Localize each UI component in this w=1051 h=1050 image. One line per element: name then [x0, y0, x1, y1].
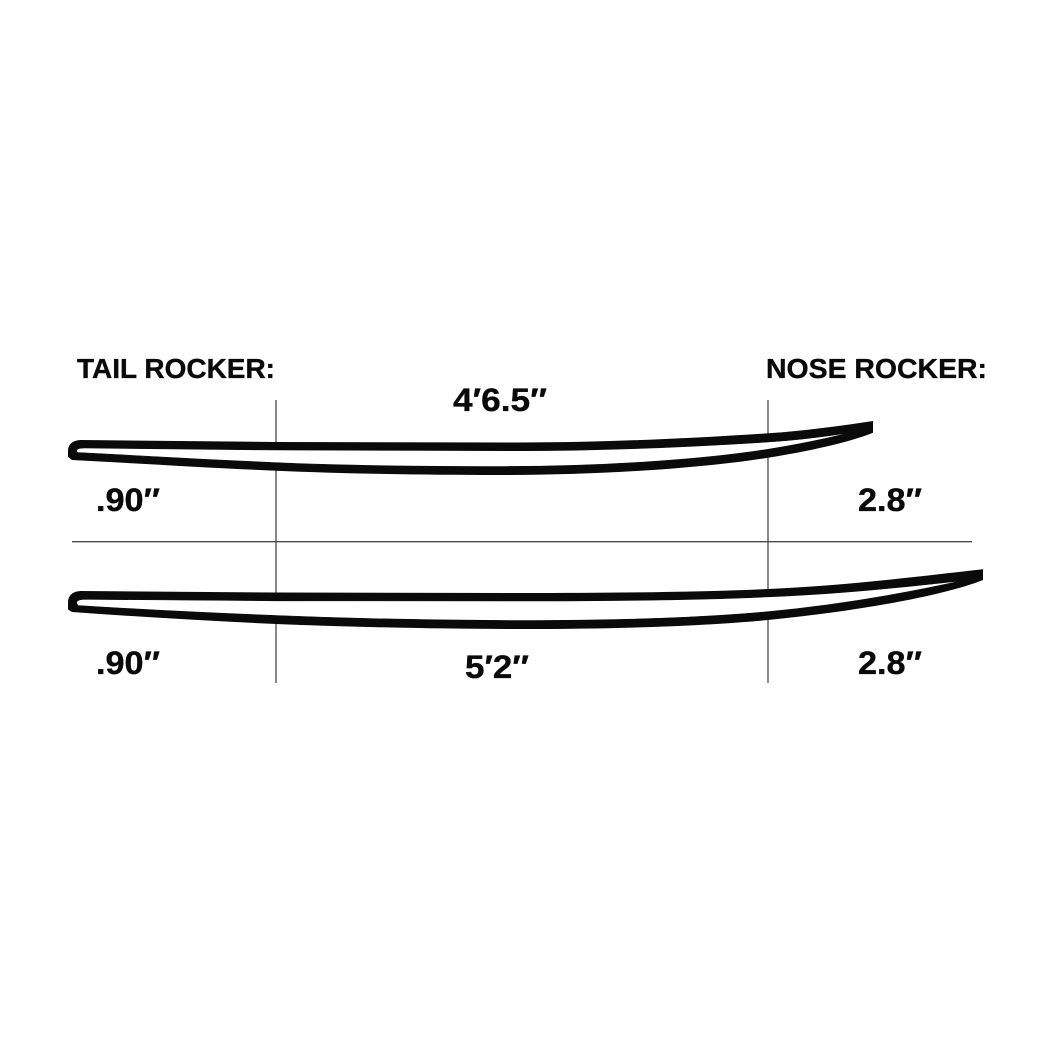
label: short board tail rocker: .90″ — [96, 482, 160, 518]
heading: nose rocker: NOSE ROCKER: — [766, 353, 987, 384]
label: long board length: 5′2″ — [465, 649, 529, 685]
heading: tail rocker: TAIL ROCKER: — [77, 353, 275, 384]
label: short board nose rocker: 2.8″ — [858, 482, 922, 518]
board profile: long board — [68, 569, 983, 629]
guide lines — [72, 400, 972, 683]
label: long board tail rocker: .90″ — [96, 645, 160, 681]
board profile: short board — [68, 421, 873, 475]
label: short board length: 4′6.5″ — [453, 382, 547, 418]
label: long board nose rocker: 2.8″ — [858, 645, 922, 681]
